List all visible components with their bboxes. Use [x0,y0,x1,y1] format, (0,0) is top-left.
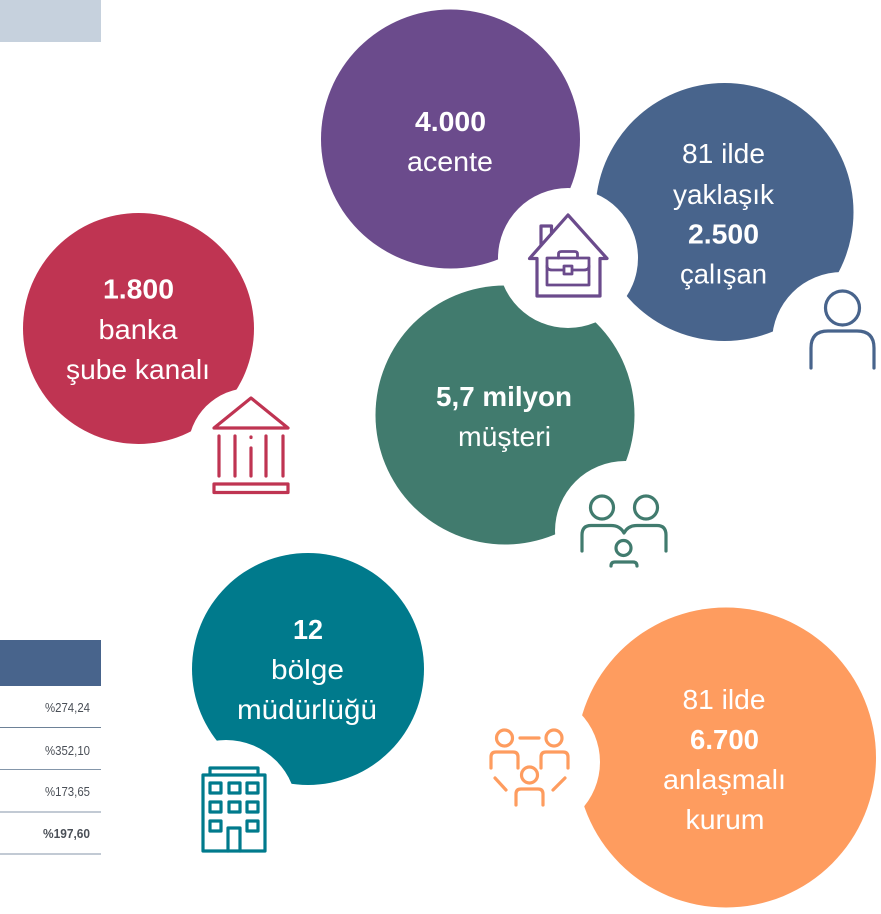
label: kurum: 6.700 [690,724,759,755]
label: banka: şube kanalı [66,354,210,385]
label: calisan [673,138,775,290]
label: acente: acente [407,146,493,177]
label: bolge: müdürlüğü [237,694,377,725]
label: acente [407,106,493,177]
label: calisan: çalışan [680,258,767,290]
label: calisan: yaklaşık [673,179,775,210]
white cutouts for icons [155,188,881,882]
label: calisan: 2.500 [688,218,759,250]
label: bolge: 12 [293,614,323,645]
label: bolge [237,614,377,725]
label: banka: 1.800 [103,274,174,304]
label: kurum: kurum [686,804,764,835]
circle: calisan [596,83,854,341]
icon: bank building [214,398,288,492]
label: musteri: 5,7 milyon [436,381,572,412]
label: banka [66,274,210,385]
label: calisan: 81 ilde [682,138,765,169]
icon: office building [203,768,265,851]
icon: network of people [491,730,568,805]
icon: house with briefcase [530,215,607,296]
label: bolge: bölge [271,654,344,685]
table fragment [0,640,101,854]
icon: family [582,496,666,566]
icon: person [811,291,874,368]
top table header fragment [0,0,101,42]
circle: banka [23,213,254,444]
table fragment: %197,60 [43,826,90,841]
circle: bolge [192,553,424,785]
circle: acente [321,10,580,268]
label: acente: 4.000 [415,106,486,137]
circle: kurum [576,608,876,908]
label: musteri: müşteri [458,421,551,452]
label: musteri [436,381,572,452]
label: kurum: anlaşmalı [663,764,786,795]
label: kurum: 81 ilde [682,684,766,715]
label: banka: banka [98,314,178,345]
table fragment: %173,65 [45,784,90,799]
table fragment: %274,24 [45,700,90,715]
label: kurum [663,684,786,835]
circle: musteri [376,286,634,544]
table fragment: %352,10 [45,743,90,758]
